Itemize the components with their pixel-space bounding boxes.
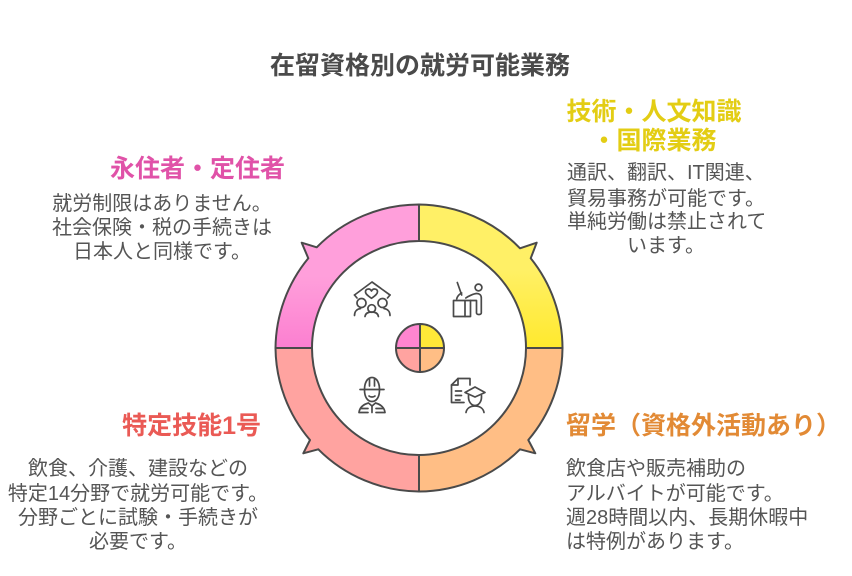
panel: 技術・人文知識・国際業務 [566,98,766,257]
text block: 留学 description [566,457,808,553]
text block: 留学 description: は特例があります。 [566,530,744,553]
heading: 特定技能1号: 特定技能1号 [122,412,261,440]
text block: 技術 description: 貿易事務が可能です。 [567,187,765,210]
panel: 特定技能1号 [8,412,268,553]
icon: student with document [452,378,485,412]
heading: 技術・人文知識・国際業務 [566,98,742,155]
panel: 永住者・定住者 [52,155,285,263]
heading: 技術・人文知識・国際業務: 技術・人文知識 [566,98,742,126]
ring segment: red [276,348,419,492]
center disc [396,324,444,372]
ring segment: pink [276,204,419,348]
heading: 留学（資格外活動あり）: 留学（資格外活動あり） [566,412,841,440]
text block: 特定技能 description: 分野ごとに試験・手続きが [18,506,258,529]
heading: 永住者・定住者: 永住者・定住者 [110,155,285,183]
ring chart [276,204,562,491]
text block: 技術 description: 通訳、翻訳、IT関連、 [567,161,765,184]
text block: 留学 description: 週28時間以内、長期休暇中 [566,506,808,529]
ring segment: yellow [419,204,562,348]
title: 在留資格別の就労可能業務 [270,52,570,80]
text block: 永住者 description: 日本人と同様です。 [73,240,251,263]
text block: 留学 description: 飲食店や販売補助の [566,457,746,480]
text block: 特定技能 description: 特定14分野で就労可能です。 [8,482,268,505]
icon: construction worker [359,378,385,412]
text block: 留学 description: アルバイトが可能です。 [566,482,784,505]
text block: 永住者 description: 就労制限はありません。 [52,192,272,215]
text block: 技術 description [567,161,766,257]
text block: 特定技能 description [8,457,268,553]
text block: 技術 description: います。 [627,235,705,257]
heading: 技術・人文知識・国際業務: ・国際業務 [591,127,717,155]
text block: 永住者 description [52,192,272,263]
text block: 永住者 description: 社会保険・税の手続きは [52,216,272,239]
text block: 特定技能 description: 飲食、介護、建設などの [28,457,248,480]
icon: family in house [354,282,390,316]
text block: 技術 description: 単純労働は禁止されて [567,210,766,233]
ring segment: orange [419,348,562,492]
panel: 留学（資格外活動あり） [566,412,841,553]
text block: 特定技能 description: 必要です。 [89,530,187,553]
icon: person at desk [454,282,482,316]
